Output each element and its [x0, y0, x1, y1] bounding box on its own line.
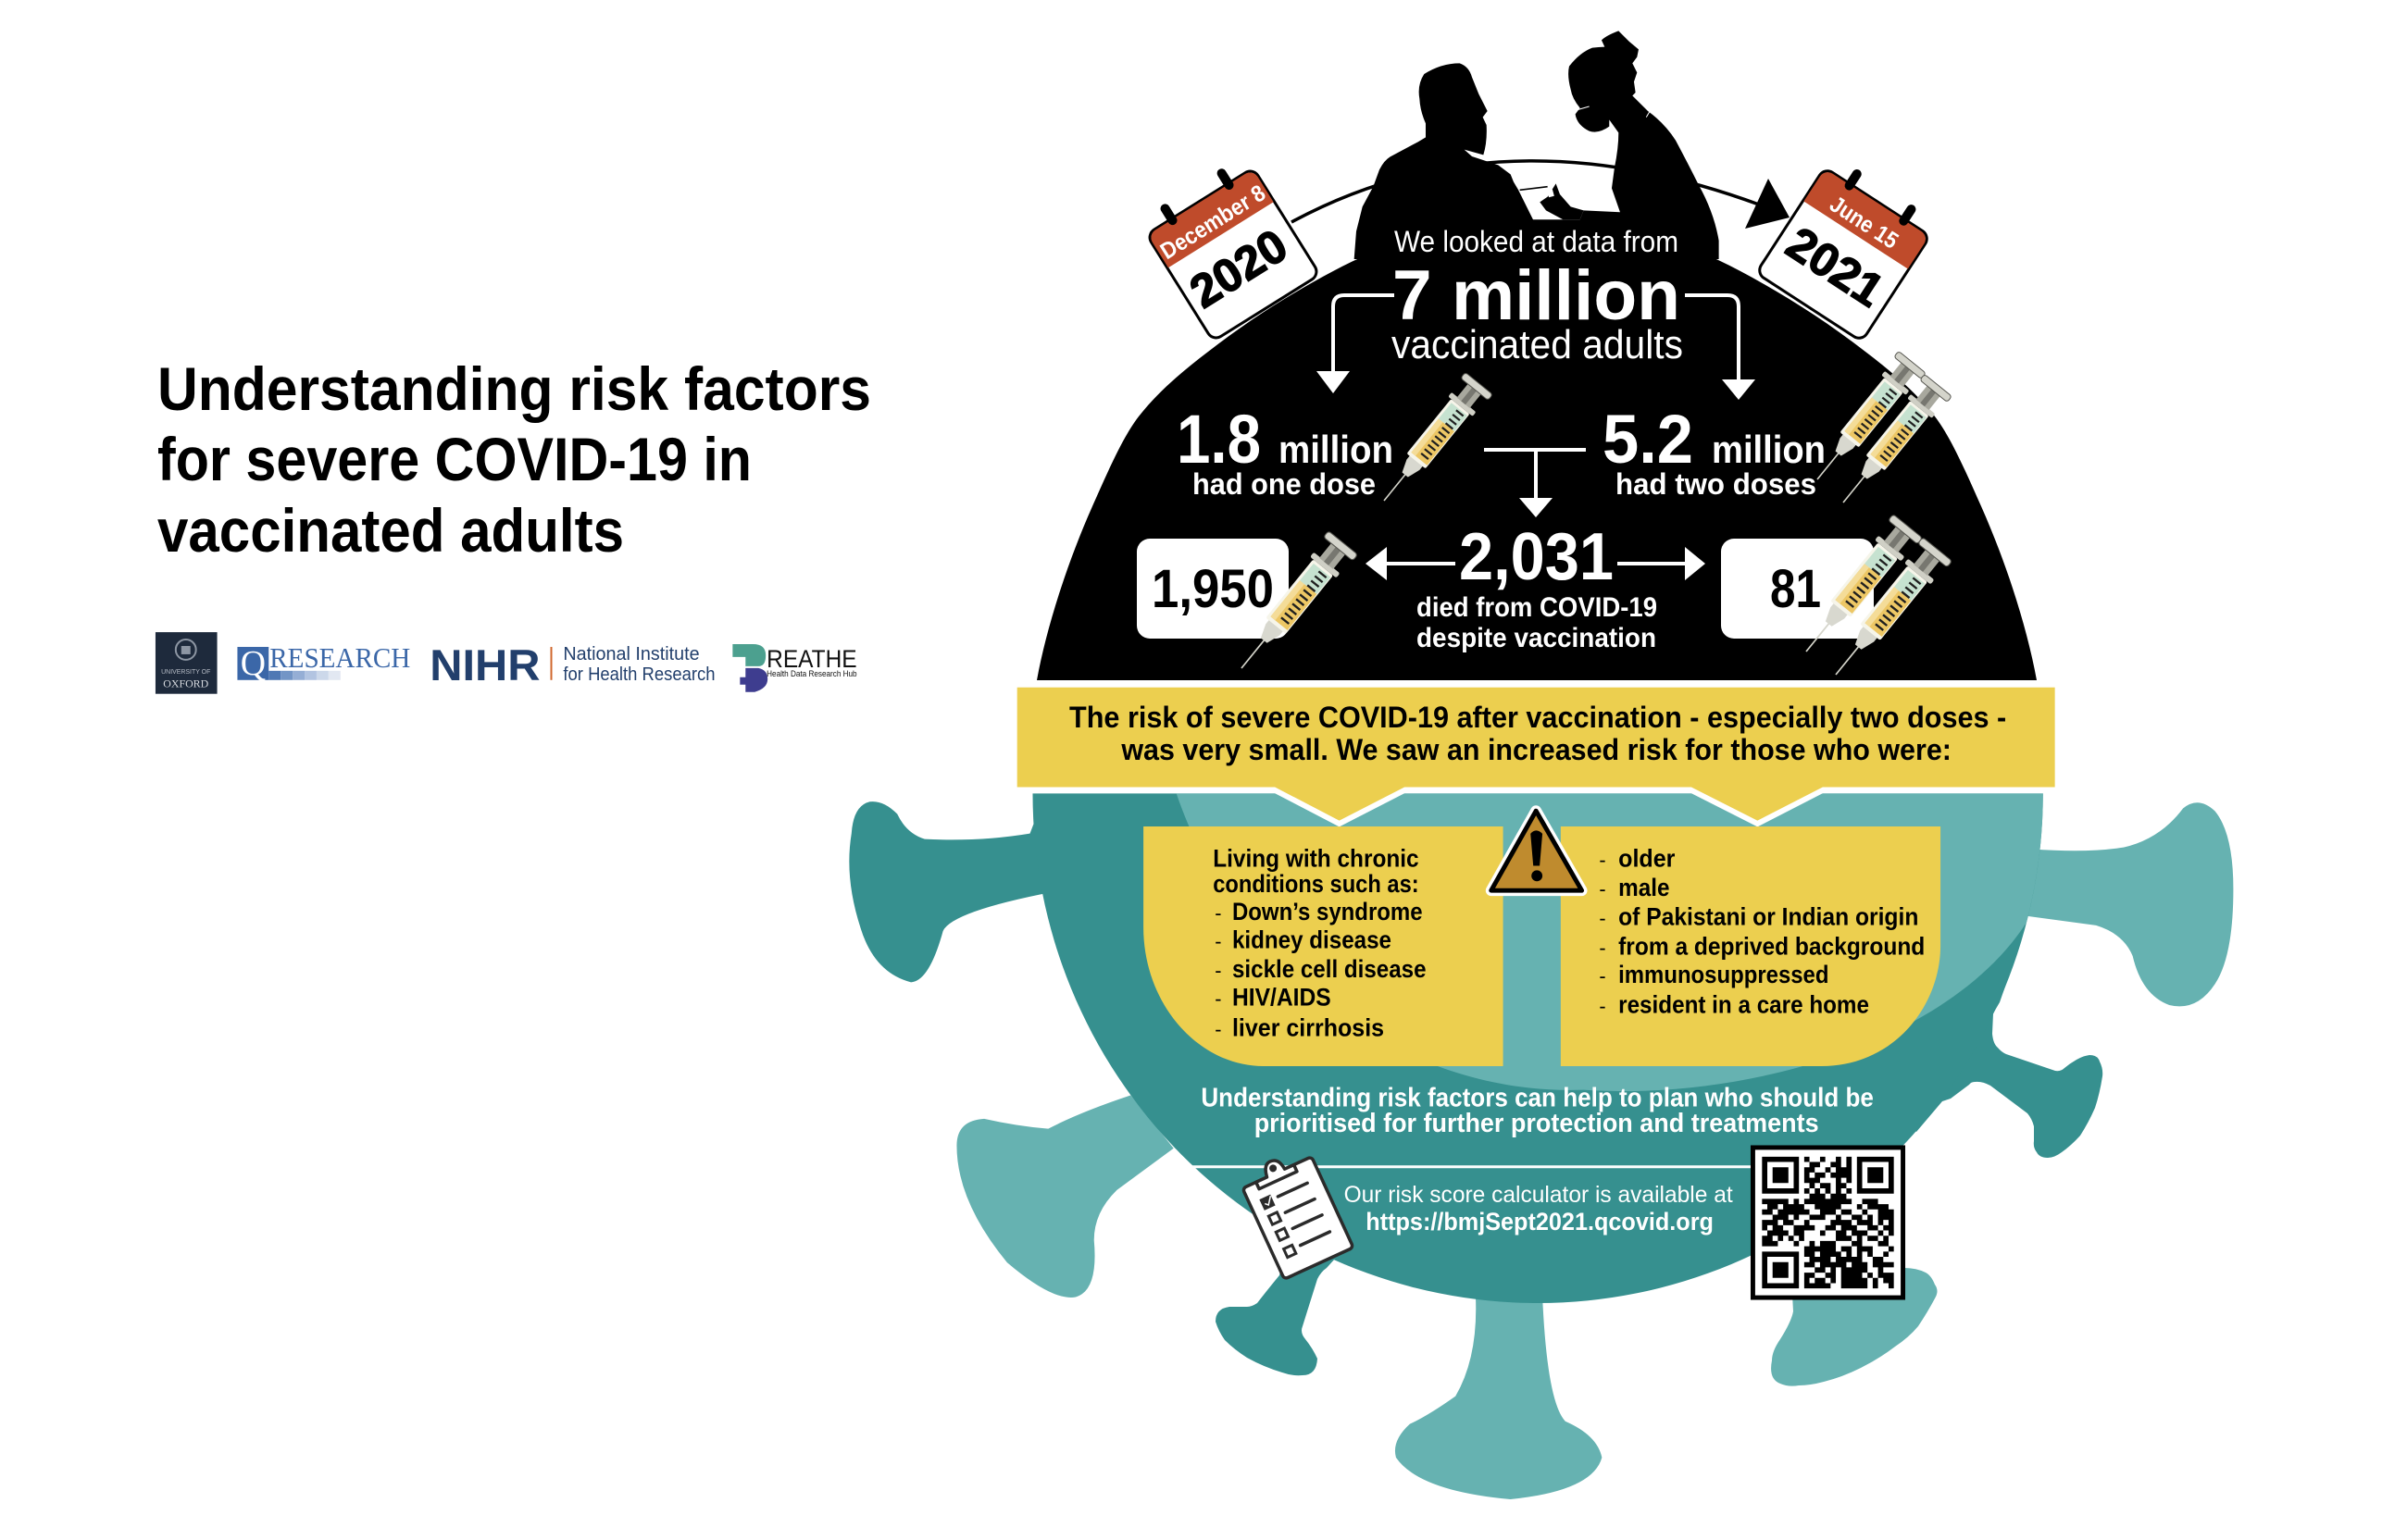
text: why it matters: Understanding risk factors can help to plan who should be — [1201, 1083, 1874, 1112]
deaths box: two doses — [1721, 539, 1874, 639]
logo: Breathe: Health Data Research Hub — [767, 669, 857, 678]
panel: demographic factors: - — [1599, 907, 1606, 930]
panel: chronic conditions: liver cirrhosis — [1232, 1013, 1384, 1041]
heading: study population: vaccinated adults — [1391, 322, 1683, 367]
logos row — [156, 632, 857, 694]
stat: total deaths: died from COVID-19 — [1416, 592, 1657, 623]
panel: chronic conditions: - — [1215, 901, 1221, 925]
calendar: December 8 2020: 2020 — [1181, 219, 1296, 318]
stat: total deaths: despite vaccination — [1416, 623, 1656, 653]
arrow: to two doses — [1685, 295, 1755, 400]
panel: chronic conditions: HIV/AIDS — [1232, 984, 1331, 1012]
silhouette: nurse — [1568, 31, 1719, 259]
stat: two doses — [1603, 401, 1826, 501]
calendar: June 15 2021: 2021 — [1777, 217, 1893, 317]
panel: demographic factors: immunosuppressed — [1618, 961, 1828, 988]
lower section — [1015, 685, 2058, 1298]
banner: key finding: The risk of severe COVID-19 after vaccination - especially two doses - — [1069, 700, 2006, 734]
calendar: December 8 2020: December 8 — [1156, 180, 1270, 265]
stat: two doses: million — [1712, 428, 1826, 471]
text: why it matters: prioritised for further protection and treatments — [1254, 1109, 1819, 1138]
heading: study population — [1391, 225, 1683, 367]
stat: one dose: 1.8 — [1177, 401, 1261, 478]
panel: demographic factors: - — [1599, 964, 1606, 987]
divider line — [1191, 1165, 1752, 1168]
panel: chronic conditions: kidney disease — [1232, 925, 1391, 953]
panel: demographic factors — [1561, 826, 1940, 1066]
panel: chronic conditions: conditions such as: — [1213, 870, 1419, 898]
icon: clipboard — [1237, 1145, 1353, 1279]
text: calculator link: https://bmjSept2021.qcovid.org — [1366, 1208, 1714, 1236]
heading: study population: 7 million — [1392, 256, 1680, 335]
stat: two doses: 5.2 — [1603, 401, 1693, 478]
panel: demographic factors: - — [1599, 848, 1606, 871]
stat: total deaths: 2,031 — [1459, 520, 1614, 594]
panel: demographic factors: of Pakistani or Indian origin — [1618, 903, 1918, 931]
arrow: to 1,950 — [1366, 547, 1455, 580]
deaths box: one dose — [1137, 539, 1289, 639]
title — [157, 354, 871, 565]
stat: one dose: million — [1278, 428, 1393, 471]
panel: demographic factors: - — [1599, 995, 1606, 1018]
title: for severe COVID-19 in — [157, 425, 752, 493]
panel: demographic factors: - — [1599, 936, 1606, 959]
stat: one dose — [1177, 401, 1393, 501]
timeline arc — [1291, 161, 1759, 222]
calendar: December 8 2020 — [1138, 154, 1320, 342]
arrow: connector to deaths — [1484, 450, 1586, 517]
body dark — [1032, 793, 2043, 1303]
spike: lower left — [956, 1096, 1174, 1298]
text: why it matters — [1201, 1083, 1874, 1138]
spike: bottom left — [1216, 1240, 1352, 1375]
body light highlight — [1177, 793, 2043, 1091]
panel: demographic factors: male — [1618, 874, 1669, 901]
silhouette: hand with syringe — [1520, 106, 1650, 219]
spike: right middle — [1852, 962, 2102, 1158]
panel: chronic conditions: - — [1215, 987, 1221, 1011]
logo: University of Oxford — [156, 632, 218, 694]
logo: Breathe: REATHE — [767, 645, 857, 673]
stat: two doses: had two doses — [1615, 467, 1816, 501]
arrow: to 81 — [1617, 547, 1705, 580]
panel: chronic conditions: - — [1215, 1017, 1221, 1040]
logo: NIHR: National Institute — [563, 644, 700, 664]
stat: total deaths — [1416, 520, 1657, 653]
logo: Breathe — [732, 644, 857, 692]
spike: top left — [849, 801, 1053, 982]
virus body — [1032, 793, 2043, 1303]
spike: bottom centre — [1395, 1296, 1602, 1499]
icon: two syringes — [1803, 351, 1952, 514]
people silhouettes — [1354, 31, 1719, 259]
panel: chronic conditions — [1143, 826, 1503, 1066]
panel: demographic factors: older — [1618, 844, 1675, 872]
logo: University of Oxford: OXFORD — [163, 677, 209, 690]
silhouette: patient — [1354, 63, 1611, 259]
logo: NIHR: NIHR — [430, 641, 541, 690]
logo: University of Oxford: UNIVERSITY OF — [161, 669, 210, 676]
banner: key finding: was very small. We saw an increased risk for those who were: — [1120, 732, 1952, 766]
calendar: June 15 2021: June 15 — [1825, 192, 1902, 255]
deaths box: one dose: 1,950 — [1152, 559, 1274, 619]
icon: warning triangle — [1491, 811, 1582, 890]
stat: one dose: had one dose — [1192, 467, 1376, 501]
icon: syringe 1,950 — [1227, 531, 1358, 680]
spike: bottom right — [1771, 1268, 1937, 1386]
panel: chronic conditions: - — [1215, 959, 1221, 982]
logo: QResearch — [237, 642, 410, 683]
icon: syringe one dose — [1370, 372, 1492, 512]
icon: two syringes 81 — [1791, 515, 1952, 687]
banner: key finding — [1015, 685, 2058, 824]
logo: NIHR — [430, 641, 715, 690]
QR code — [1752, 1148, 1903, 1298]
panel: demographic factors: resident in a care home — [1618, 991, 1869, 1019]
logo: NIHR: for Health Research — [563, 664, 715, 685]
heading: study population: We looked at data from — [1394, 225, 1678, 258]
timeline arrowhead — [1745, 179, 1790, 229]
spike: top right — [2014, 802, 2233, 1006]
panel: chronic conditions: sickle cell disease — [1232, 955, 1427, 983]
text: calculator link: Our risk score calculator is available at — [1344, 1183, 1733, 1208]
calendar: June 15 2021 — [1756, 154, 1939, 342]
logo: QResearch: RESEARCH — [269, 642, 410, 674]
title: vaccinated adults — [157, 496, 624, 565]
panel: demographic factors: - — [1599, 877, 1606, 900]
panel: chronic conditions: Down’s syndrome — [1232, 898, 1423, 925]
panel: demographic factors: from a deprived background — [1618, 932, 1925, 960]
panel: chronic conditions: - — [1215, 929, 1221, 952]
panel: chronic conditions: Living with chronic — [1213, 844, 1419, 872]
black dome — [1037, 222, 2037, 680]
logo: QResearch: Q — [241, 644, 266, 683]
text: calculator link — [1344, 1183, 1733, 1236]
deaths box: two doses: 81 — [1770, 559, 1821, 619]
title: Understanding risk factors — [157, 354, 871, 423]
arrow: to one dose — [1316, 295, 1394, 393]
virus spikes — [849, 801, 2233, 1499]
